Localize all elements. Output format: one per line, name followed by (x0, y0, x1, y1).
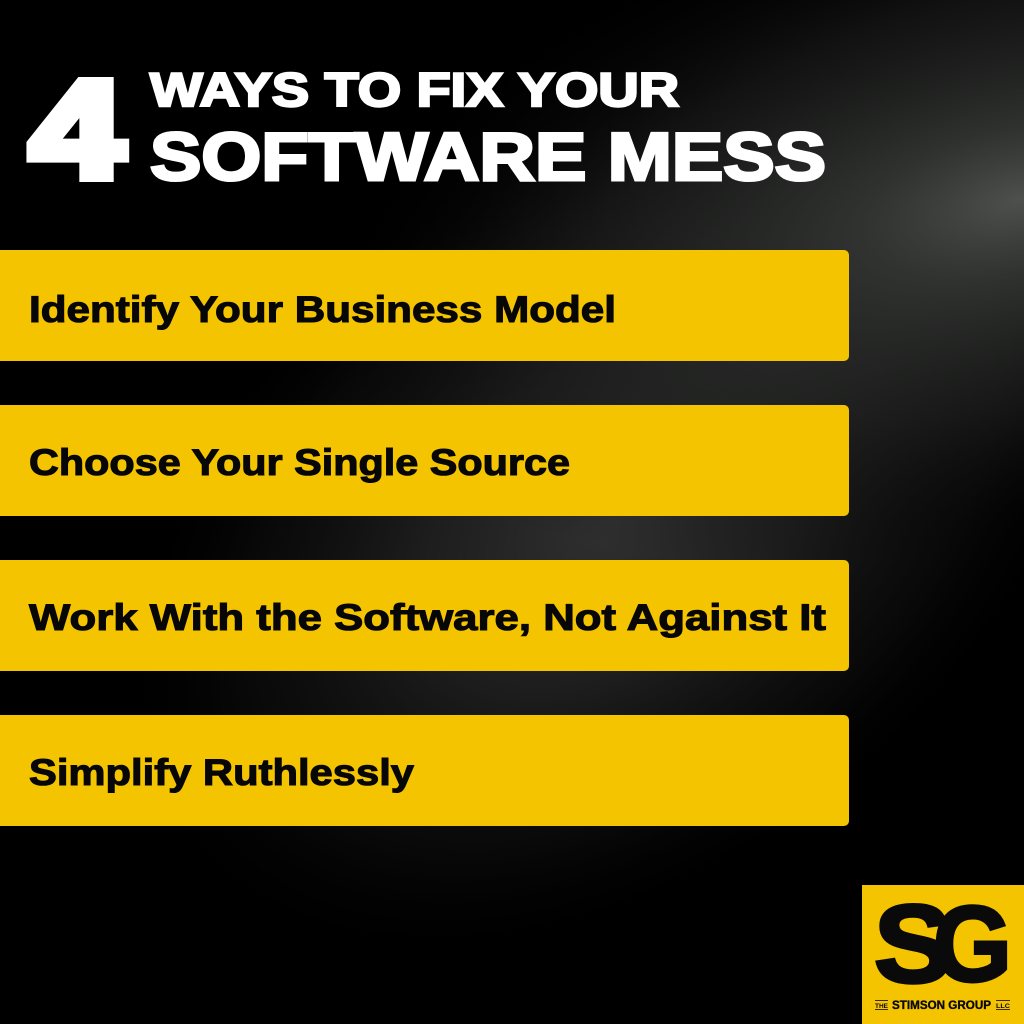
bar 1 label: Identify Your Business Model (29, 289, 616, 330)
title line 2: SOFTWARE MESS (150, 119, 826, 195)
bar 1 (0, 250, 849, 361)
logo wordmark: THE (875, 1004, 888, 1010)
bar 2 label: Choose Your Single Source (29, 442, 570, 483)
logo monogram: S (874, 883, 952, 1006)
logo wordmark: STIMSON GROUP (892, 1000, 991, 1012)
bar 4 label: Simplify Ruthlessly (29, 752, 414, 793)
logo wordmark: LLC (996, 1004, 1011, 1010)
bar 4 (0, 715, 849, 826)
logo monogram (874, 883, 1012, 1006)
title line 1: WAYS TO FIX YOUR (150, 63, 679, 116)
bar 2 (0, 405, 849, 516)
bar 3 (0, 560, 849, 671)
logo monogram: G (933, 883, 1012, 1004)
logo (862, 883, 1024, 1024)
numeral 4: 4 (30, 53, 124, 207)
bar 3 label: Work With the Software, Not Against It (29, 597, 826, 638)
title (30, 53, 826, 207)
